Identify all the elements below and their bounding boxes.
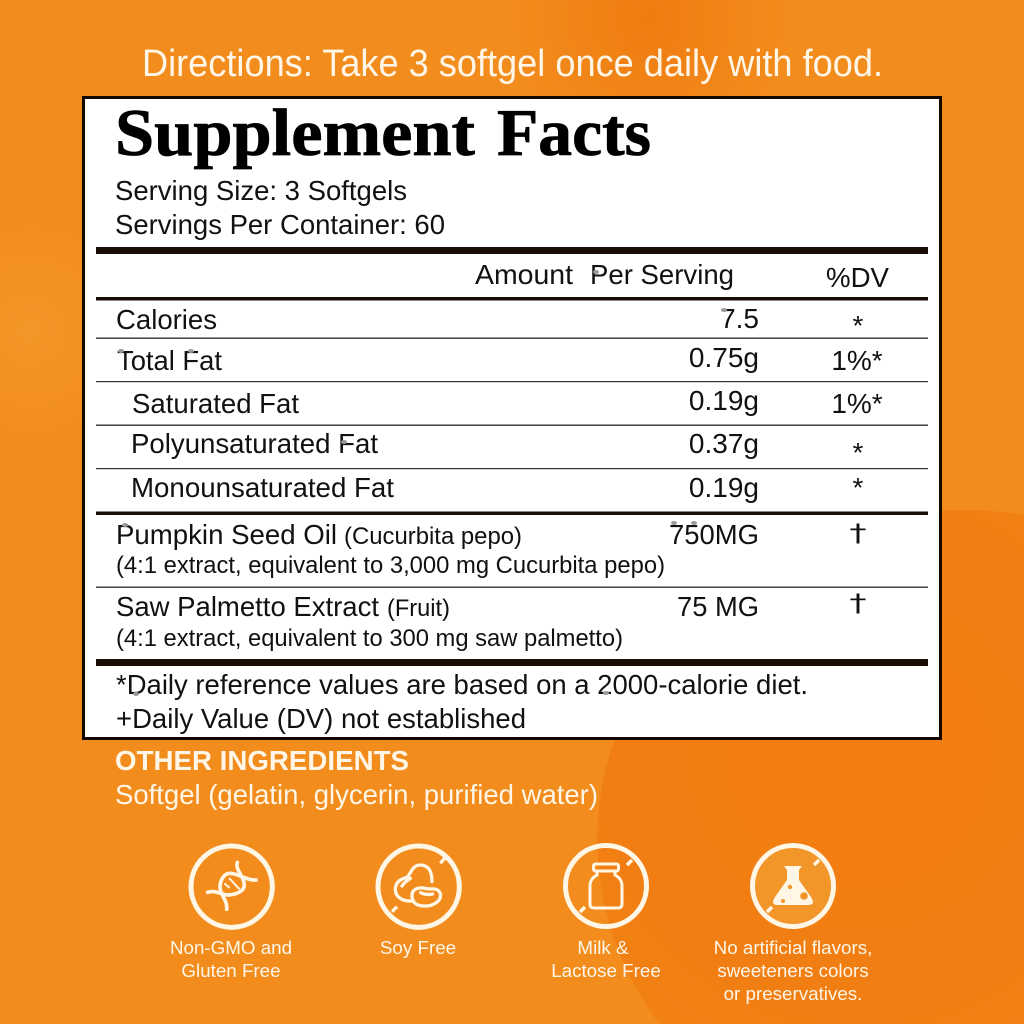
supplement facts panel <box>84 96 940 738</box>
row: pumpkin seed oil: † <box>850 519 866 547</box>
row: pumpkin seed oil: Pumpkin Seed Oil <box>116 519 337 550</box>
row: pumpkin seed oil <box>116 519 866 579</box>
title <box>115 96 651 170</box>
row: saturated fat <box>132 385 883 419</box>
label: non-gmo and gluten free <box>170 937 292 981</box>
column headers: %DV <box>826 262 889 293</box>
row: saw palmetto extract <box>116 589 866 652</box>
serving information: Serving Size: 3 Softgels <box>115 175 407 206</box>
row: monounsaturated fat <box>131 472 864 503</box>
footnotes: *Daily reference values are based on a 2000-calorie diet. <box>116 669 808 700</box>
icon: no artificial flavors <box>752 846 834 926</box>
label: milk and lactose free: Lactose Free <box>551 960 661 981</box>
column headers: Per Serving <box>590 259 734 290</box>
row: monounsaturated fat: * <box>853 472 864 503</box>
label: no artificial flavors: or preservatives. <box>724 983 862 1004</box>
label: no artificial flavors: No artificial flavors, <box>714 937 872 958</box>
row: total fat: 0.75g <box>689 342 759 373</box>
column headers: Amount <box>475 259 573 290</box>
row: polyunsaturated fat: 0.37g <box>689 428 759 459</box>
icon: non-gmo dna <box>191 846 272 927</box>
row: saw palmetto extract: 75 MG <box>677 591 759 622</box>
row: saw palmetto extract: (4:1 extract, equivalent to 300 mg saw palmetto) <box>116 625 623 652</box>
other ingredients: Softgel (gelatin, glycerin, purified water) <box>115 779 598 810</box>
row: calories: Calories <box>116 304 217 335</box>
label: soy free: Soy Free <box>380 937 456 958</box>
row: saw palmetto extract: † <box>850 589 866 617</box>
row: polyunsaturated fat: * <box>853 437 864 468</box>
row: polyunsaturated fat <box>131 428 864 468</box>
row: saturated fat: 1%* <box>831 388 883 419</box>
other ingredients <box>115 745 598 810</box>
footnotes: +Daily Value (DV) not established <box>116 703 526 734</box>
column headers <box>475 259 889 293</box>
label: milk and lactose free: Milk & <box>577 937 629 958</box>
title: Supplement <box>115 96 476 170</box>
row: monounsaturated fat: 0.19g <box>689 472 759 503</box>
label: no artificial flavors <box>714 937 872 1004</box>
row: monounsaturated fat: Monounsaturated Fat <box>131 472 394 503</box>
title: Facts <box>497 96 651 170</box>
serving information: Servings Per Container: 60 <box>115 209 445 240</box>
label: non-gmo and gluten free: Non-GMO and <box>170 937 292 958</box>
label: no artificial flavors: sweeteners colors <box>717 960 869 981</box>
directions heading: Directions: Take 3 softgel once daily with food. <box>142 43 883 85</box>
row: pumpkin seed oil: (Cucurbita pepo) <box>344 523 522 550</box>
row: saw palmetto extract: Saw Palmetto Extract <box>116 591 379 622</box>
icon: milk and lactose free <box>566 846 646 926</box>
icon: soy free <box>378 846 459 927</box>
row: saw palmetto extract: (Fruit) <box>387 595 450 622</box>
row: polyunsaturated fat: Polyunsaturated Fat <box>131 428 378 459</box>
label: non-gmo and gluten free: Gluten Free <box>181 960 281 981</box>
row: saturated fat: 0.19g <box>689 385 759 416</box>
other ingredients: OTHER INGREDIENTS <box>115 745 409 776</box>
label: milk and lactose free <box>551 937 661 981</box>
row: calories: 7.5 <box>720 303 759 334</box>
row: calories <box>116 303 864 341</box>
row: pumpkin seed oil: (4:1 extract, equivalent to 3,000 mg Cucurbita pepo) <box>116 552 665 579</box>
row: saturated fat: Saturated Fat <box>132 388 299 419</box>
footnotes <box>116 669 808 734</box>
row: total fat <box>117 342 883 376</box>
rules <box>96 247 928 666</box>
row: total fat: 1%* <box>831 345 883 376</box>
row: pumpkin seed oil: 750MG <box>669 519 759 550</box>
row: calories: * <box>853 310 864 341</box>
serving information <box>115 175 445 240</box>
row: total fat: Total Fat <box>117 345 222 376</box>
